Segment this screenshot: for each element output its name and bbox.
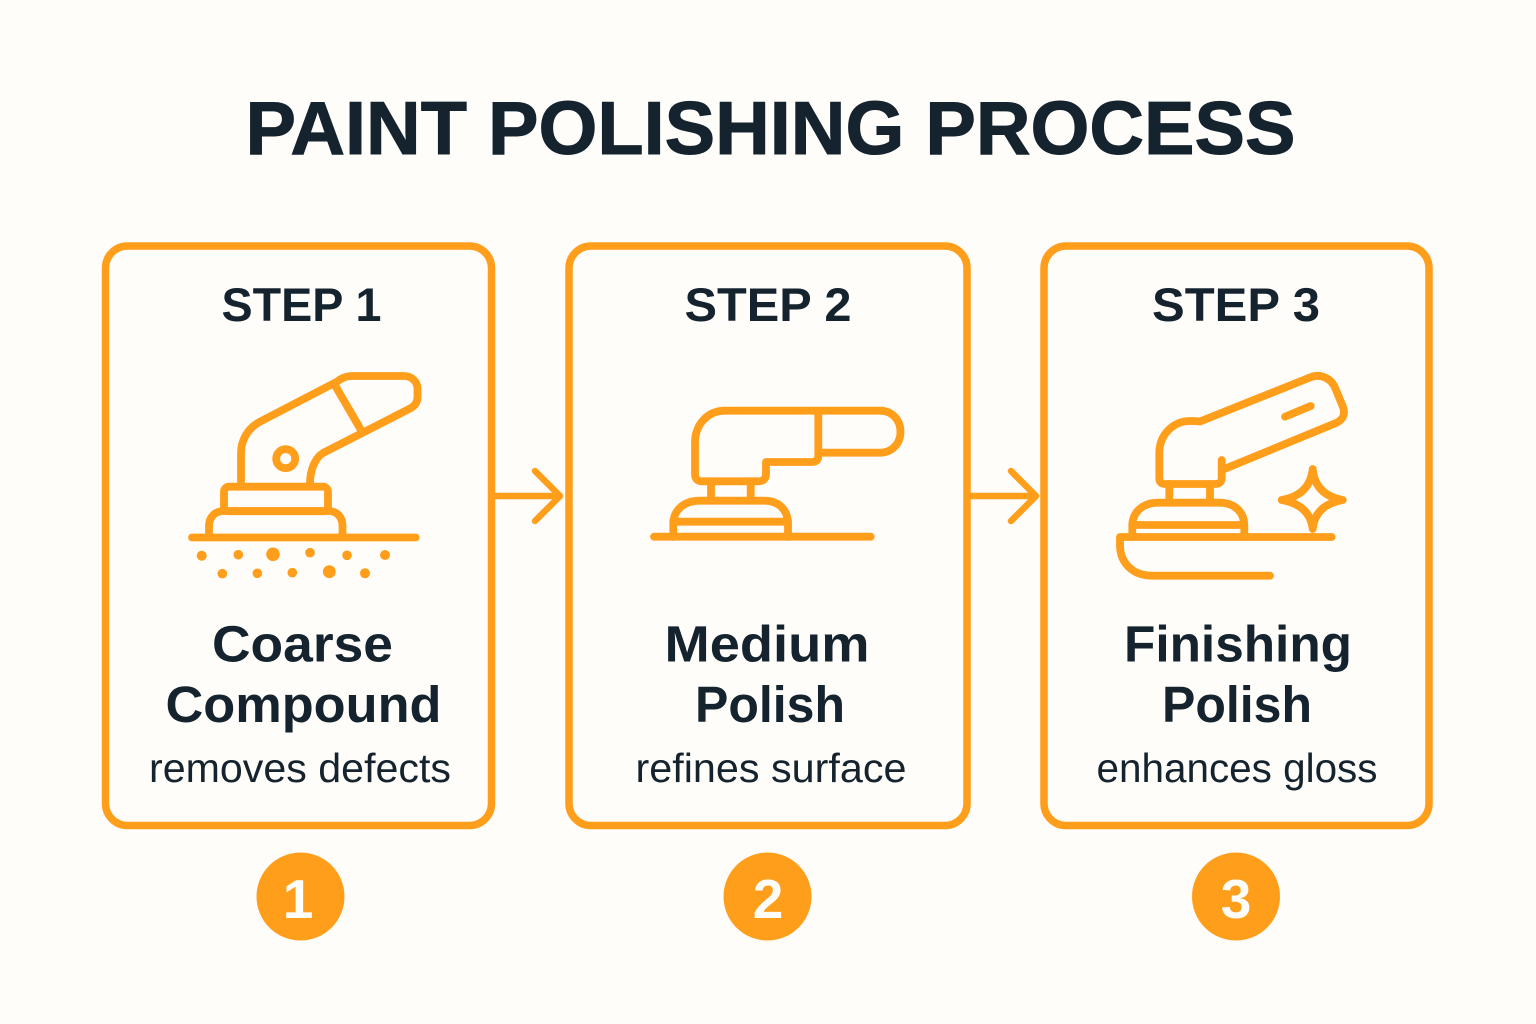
card outline step 1 [106, 246, 492, 826]
step 1 description: removes defects [149, 745, 451, 791]
sparkle [1282, 469, 1343, 529]
card outline step 2 [569, 246, 967, 826]
step 2 name: Medium [664, 616, 870, 672]
icon: horizontal polisher [654, 411, 900, 537]
panel: step 2 medium polish [569, 246, 967, 826]
number badge 3: 3 [1221, 868, 1251, 930]
step 3 description: enhances gloss [1096, 745, 1378, 791]
number badge 1: 1 [283, 868, 313, 930]
step 3 name: Finishing [1124, 616, 1352, 672]
panel: step 1 coarse compound [106, 246, 492, 826]
heading: step 2: STEP 2 [684, 278, 852, 331]
number badge 2: 2 [753, 868, 783, 930]
heading: step 1: STEP 1 [222, 278, 382, 331]
number badge 3 [1192, 852, 1280, 940]
heading: step 3: STEP 3 [1152, 278, 1320, 331]
step 3 name: Polish [1162, 676, 1312, 733]
icon: angled polisher on rough surface [192, 376, 418, 578]
panel: step 3 finishing polish [1044, 246, 1429, 826]
number badge 2 [724, 852, 812, 940]
step 1 name [166, 616, 442, 733]
step 2 description: refines surface [636, 745, 906, 791]
step 2 name: Polish [695, 676, 845, 733]
step 1 name: Compound [166, 676, 442, 733]
step 2 name [664, 616, 870, 733]
title: PAINT POLISHING PROCESS [246, 86, 1296, 170]
arrow: step 1 to step 2 [495, 471, 560, 521]
defect dots [197, 548, 390, 578]
card outline step 3 [1044, 246, 1429, 826]
number badge 1 [256, 852, 344, 940]
icon: polisher with sparkle on glossy surface [1120, 376, 1344, 576]
step 1 name: Coarse [212, 616, 393, 672]
step 3 name [1124, 616, 1352, 733]
arrow: step 2 to step 3 [971, 471, 1036, 521]
